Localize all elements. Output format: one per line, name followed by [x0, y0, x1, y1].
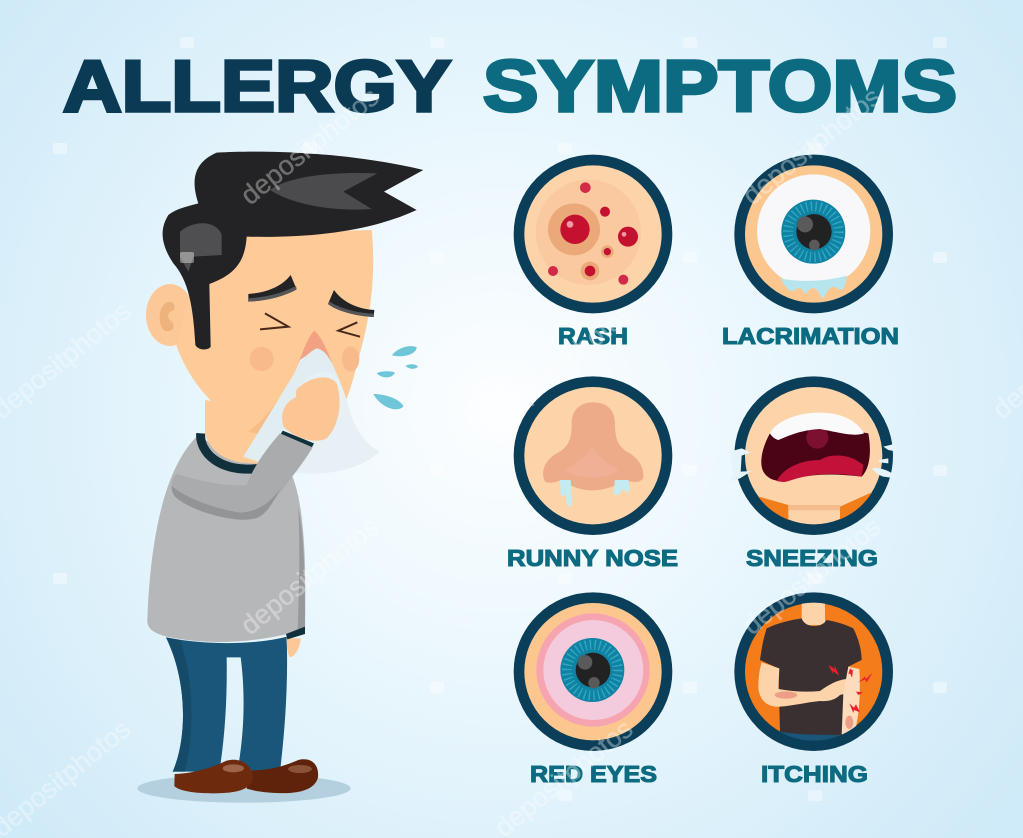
character: man sneezing into tissue	[137, 152, 423, 803]
label: lacrimation: LACRIMATION	[722, 323, 899, 349]
hair	[163, 152, 423, 349]
hand	[282, 377, 340, 441]
icon: lacrimation eye	[740, 160, 888, 308]
tissue	[257, 348, 380, 474]
watermark: depositphotos	[737, 512, 886, 641]
eyebrows	[248, 275, 297, 302]
watermark: depositphotos	[235, 512, 384, 641]
watermark: depositphotos	[489, 298, 638, 427]
trousers	[166, 637, 287, 772]
jumper	[147, 437, 305, 642]
head	[163, 152, 423, 474]
tissue fold	[243, 348, 340, 464]
title: SYMPTOMS	[483, 47, 957, 127]
ground shadow	[137, 774, 351, 803]
lower body	[137, 437, 351, 803]
label: itching: ITCHING	[761, 761, 868, 787]
cuff	[286, 627, 305, 639]
cheeks	[250, 347, 274, 371]
neck	[205, 400, 287, 463]
label: red eyes: RED EYES	[530, 761, 657, 787]
icon: rash	[519, 160, 667, 308]
nose	[298, 331, 332, 363]
label: runny nose: RUNNY NOSE	[507, 545, 678, 571]
collar	[201, 433, 260, 469]
symptom circles row 1	[519, 160, 888, 308]
face	[177, 230, 373, 434]
title: ALLERGY	[63, 47, 451, 127]
watermark: depositphotos	[737, 82, 886, 211]
icon: itching arm	[740, 598, 888, 746]
closed eyes	[260, 313, 288, 329]
ear	[146, 284, 194, 346]
symptom circles row 2	[519, 382, 897, 530]
icon: runny nose	[519, 382, 667, 530]
snot drops	[392, 346, 417, 356]
raised arm	[171, 433, 313, 520]
label: sneezing: SNEEZING	[746, 545, 878, 571]
shoes	[247, 759, 318, 793]
cuff	[278, 431, 314, 452]
icon: sneezing mouth	[730, 382, 897, 530]
icon: red eye	[519, 598, 667, 746]
label: rash: RASH	[558, 323, 628, 349]
symptom circles row 3	[519, 598, 888, 746]
hidden hand	[287, 638, 301, 657]
watermark: depositphotos	[235, 82, 384, 211]
title	[63, 47, 957, 127]
